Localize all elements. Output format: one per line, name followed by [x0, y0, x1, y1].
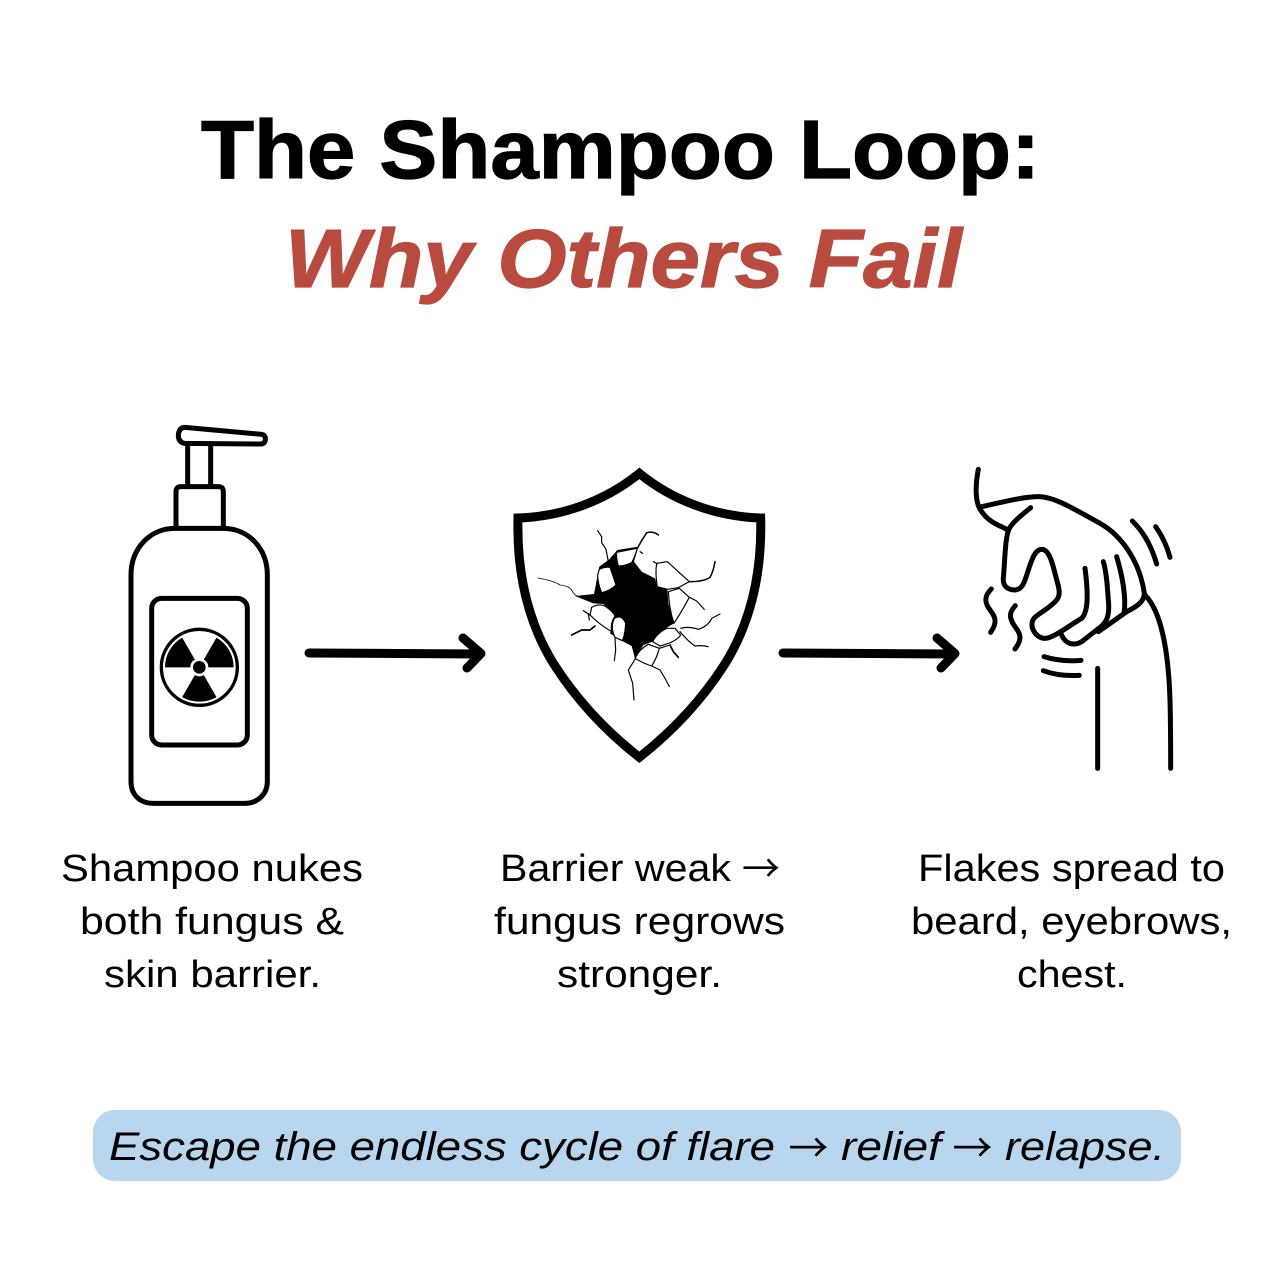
callout: escape the cycle: Escape the endless cycle of flare: [109, 1125, 775, 1169]
text block: barrier caption: stronger.: [557, 954, 722, 996]
callout: escape the cycle: relief: [841, 1125, 945, 1169]
callout: escape the cycle: relapse.: [1005, 1125, 1165, 1169]
text block: flakes caption: [911, 848, 1232, 996]
arrow: bottle to shield: [309, 638, 481, 668]
text block: flakes caption: beard, eyebrows,: [911, 901, 1232, 943]
callout: escape the cycle: →: [952, 1116, 992, 1174]
callout: escape the cycle: [93, 1110, 1181, 1181]
callout: escape the cycle: →: [788, 1116, 828, 1174]
text block: flakes caption: chest.: [1017, 954, 1127, 996]
icon: shampoo bottle with radiation label: [131, 427, 267, 803]
text block: barrier caption: →: [742, 838, 780, 893]
text block: barrier caption: [494, 838, 785, 996]
text block: shampoo caption: skin barrier.: [104, 954, 321, 996]
title: Why Others Fail: [285, 212, 964, 305]
title: The Shampoo Loop:: [201, 103, 1040, 196]
text block: shampoo caption: Shampoo nukes: [61, 848, 363, 890]
title: [201, 103, 1040, 305]
icon: scratching hand: [976, 469, 1171, 768]
text block: flakes caption: Flakes spread to: [918, 848, 1225, 890]
text block: shampoo caption: both fungus &: [80, 901, 344, 943]
icon: cracked shield: [518, 473, 761, 757]
text block: shampoo caption: [61, 848, 363, 996]
text block: barrier caption: Barrier weak: [500, 848, 732, 890]
arrow: shield to hand: [783, 638, 955, 668]
text block: barrier caption: fungus regrows: [494, 901, 785, 943]
